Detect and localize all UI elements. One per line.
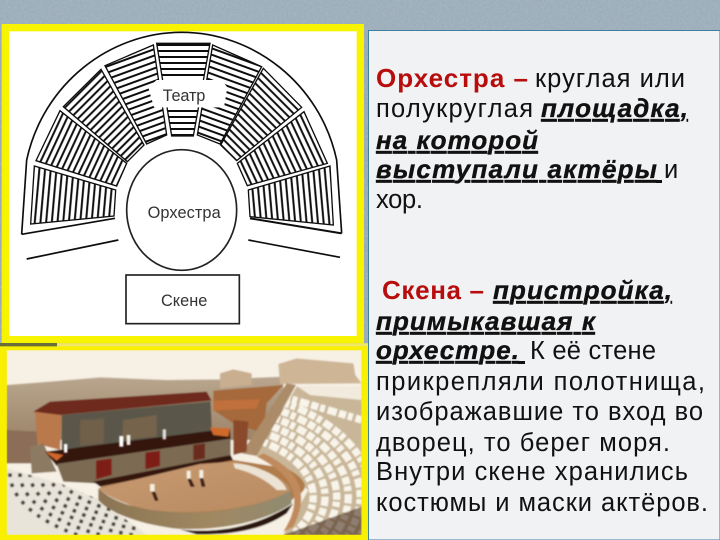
text block: Скена definition: орхестре. (376, 335, 519, 365)
text block: Скена definition: Внутри скене хранились (376, 458, 688, 486)
panel: theatre plan diagram (2, 24, 364, 344)
figures on stage and orchestra (64, 429, 205, 501)
yellow frame (0, 343, 368, 540)
text block: Скена definition: К её стене (530, 337, 656, 365)
skene rectangle (126, 275, 239, 324)
seating wedges (31, 43, 333, 225)
text block: Скена definition (376, 275, 708, 517)
text block: Скена definition: Скена – (382, 275, 484, 305)
text block: Скена definition: изображавшие то вход во (376, 398, 703, 426)
label: Театр (148, 80, 227, 107)
orchestra circle: Орхестра (148, 204, 222, 222)
text block: Орхестра definition (376, 63, 688, 214)
text block: Орхестра definition: площадка, (541, 93, 688, 123)
text block: Орхестра definition: полукруглая (376, 95, 533, 123)
text block: Орхестра definition: Орхестра – (376, 63, 528, 93)
label: Театр: Театр (163, 87, 205, 105)
text block: Орхестра definition: выступали актёры (376, 154, 657, 184)
orchestra circle (127, 150, 237, 270)
panel: theatre painting (0, 343, 368, 540)
text block: Скена definition: костюмы и маски актёров. (376, 489, 708, 517)
text block: Скена definition: дворец, то берег моря. (376, 429, 670, 457)
text block: Скена definition: примыкавшая к (376, 306, 597, 336)
painting scene (6, 350, 362, 535)
text block: Орхестра definition: круглая или (535, 65, 685, 93)
outer wall and side passages (22, 32, 342, 259)
skene rectangle: Скене (161, 292, 207, 310)
panel background (368, 30, 720, 540)
text block: Орхестра definition: и (664, 156, 678, 184)
text block: Скена definition: прикрепляли полотнища, (376, 368, 705, 396)
text block: Орхестра definition: хор. (376, 186, 423, 214)
text block: Скена definition: пристройка, (493, 275, 672, 305)
yellow frame (5, 28, 360, 340)
text block: Орхестра definition: на которой (376, 125, 538, 155)
panel: text definitions (368, 30, 720, 540)
